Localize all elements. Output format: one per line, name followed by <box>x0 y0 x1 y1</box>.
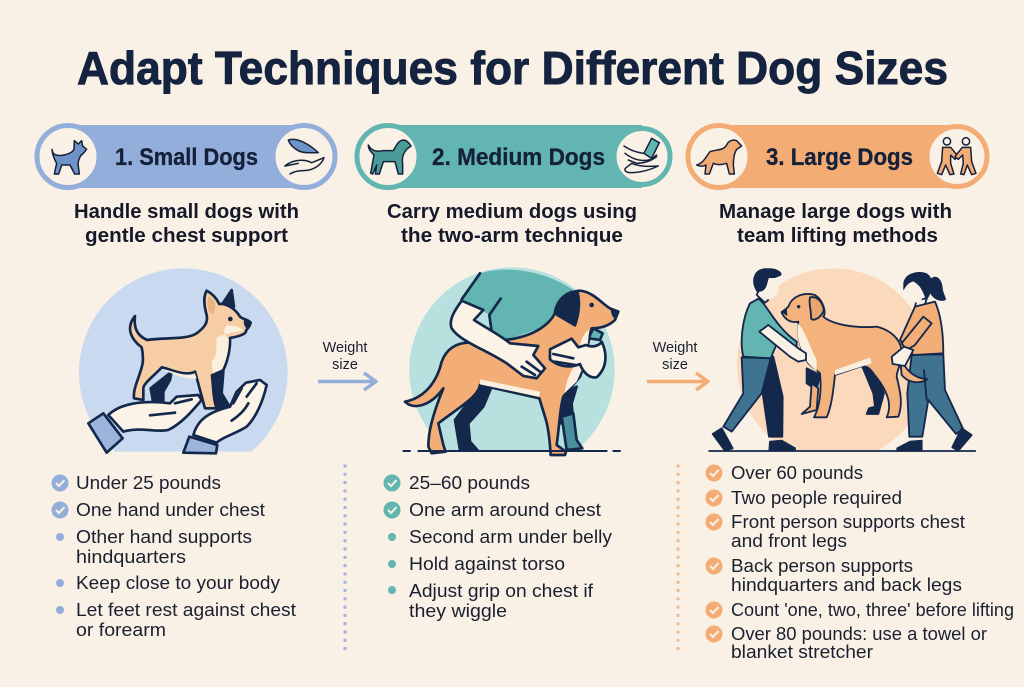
arrow: weight size 1: Weight <box>323 340 367 356</box>
bullet list: small dogs: hindquarters <box>76 547 186 567</box>
bullet list: medium dogs: Second arm under belly <box>409 527 612 547</box>
dog tail <box>900 357 927 382</box>
bullet list: medium dogs: they wiggle <box>409 601 507 621</box>
icon: medium dog <box>368 140 411 174</box>
icon: two people <box>937 138 976 175</box>
check: over 60 pounds <box>706 464 722 482</box>
bullet list: large dogs: and front legs <box>731 531 847 551</box>
bullet list: large dogs: hindquarters and back legs <box>731 575 962 595</box>
subtitle: large dogs: Manage large dogs with <box>719 201 952 223</box>
subtitle: medium dogs: the two-arm technique <box>401 225 623 247</box>
bullet list: medium dogs <box>384 473 612 621</box>
header pill: medium dogs: 2. Medium Dogs <box>432 144 605 171</box>
check: one hand under chest <box>52 502 68 518</box>
header pill: large dogs: 3. Large Dogs <box>766 144 913 171</box>
panel: large dogs <box>688 125 1014 662</box>
subtitle: small dogs: gentle chest support <box>85 225 288 247</box>
bullet list: large dogs: Over 80 pounds: use a towel or <box>731 624 987 644</box>
arrow: weight size 1: size <box>332 357 358 373</box>
bullet list: medium dogs: Adjust grip on chest if <box>409 581 594 601</box>
bullet list: large dogs: blanket stretcher <box>731 642 873 662</box>
bullet list: small dogs: One hand under chest <box>76 500 265 520</box>
bullet list: large dogs: Count 'one, two, three' before lifting <box>731 600 1014 620</box>
icon: small dog <box>52 141 87 174</box>
subtitle: small dogs <box>74 201 299 247</box>
illustration: small dog on hands <box>79 268 288 455</box>
panel: small dogs <box>37 125 335 640</box>
bullet list: large dogs: Front person supports chest <box>731 512 965 532</box>
check: front person <box>706 514 722 530</box>
icon: caring hands <box>285 139 324 174</box>
bullet list: large dogs: Over 60 pounds <box>731 463 863 483</box>
subtitle: medium dogs <box>387 201 637 247</box>
check: 25 to 60 pounds <box>384 474 400 492</box>
bullet list: small dogs: Keep close to your body <box>76 573 280 593</box>
icon: large dog <box>697 140 742 174</box>
check: one arm around chest <box>384 502 400 518</box>
illustration: medium dog carried with two arms <box>403 267 620 473</box>
check: under 25 pounds <box>52 474 68 492</box>
bullet list: medium dogs: 25–60 pounds <box>409 473 530 493</box>
woman arms and hand <box>892 317 932 366</box>
bullet list: medium dogs: Hold against torso <box>409 554 565 574</box>
icon: two arms carry <box>624 138 659 173</box>
bullet list: small dogs: Let feet rest against chest <box>76 600 296 620</box>
panel: medium dogs <box>357 125 670 621</box>
dog far legs <box>802 365 884 414</box>
bullet list: medium dogs: One arm around chest <box>409 500 601 520</box>
bullet list: small dogs: Under 25 pounds <box>76 473 221 493</box>
subtitle: medium dogs: Carry medium dogs using <box>387 201 637 223</box>
title: Adapt Techniques for Different Dog Sizes <box>77 42 948 94</box>
subtitle: large dogs: team lifting methods <box>737 225 938 247</box>
bullet list: large dogs: Two people required <box>731 488 902 508</box>
check: count <box>706 602 722 618</box>
header pill: small dogs: 1. Small Dogs <box>115 144 258 171</box>
arrow: weight size 2: size <box>662 357 688 373</box>
bullet list: small dogs: Other hand supports <box>76 527 252 547</box>
arrow: weight size 1 <box>318 340 376 390</box>
bullet list: large dogs <box>706 463 1014 662</box>
arrow: weight size 2: Weight <box>653 340 697 356</box>
dog body <box>782 294 902 417</box>
header pill: large dogs <box>688 125 987 188</box>
arrow: weight size 2 <box>647 340 708 390</box>
illustration: two people lifting a large dog <box>709 268 975 461</box>
person: man <box>713 269 806 451</box>
header pill: small dogs <box>37 125 335 188</box>
check: back person <box>706 558 722 574</box>
check: over 80 pounds <box>706 626 722 642</box>
person: woman body <box>897 273 972 451</box>
bullet list: large dogs: Back person supports <box>731 556 913 576</box>
subtitle: large dogs <box>719 201 952 247</box>
header pill: medium dogs <box>357 125 670 188</box>
check: two people required <box>706 490 722 506</box>
bullet list: small dogs <box>52 473 296 640</box>
subtitle: small dogs: Handle small dogs with <box>74 201 299 223</box>
bullet list: small dogs: or forearm <box>76 620 166 640</box>
